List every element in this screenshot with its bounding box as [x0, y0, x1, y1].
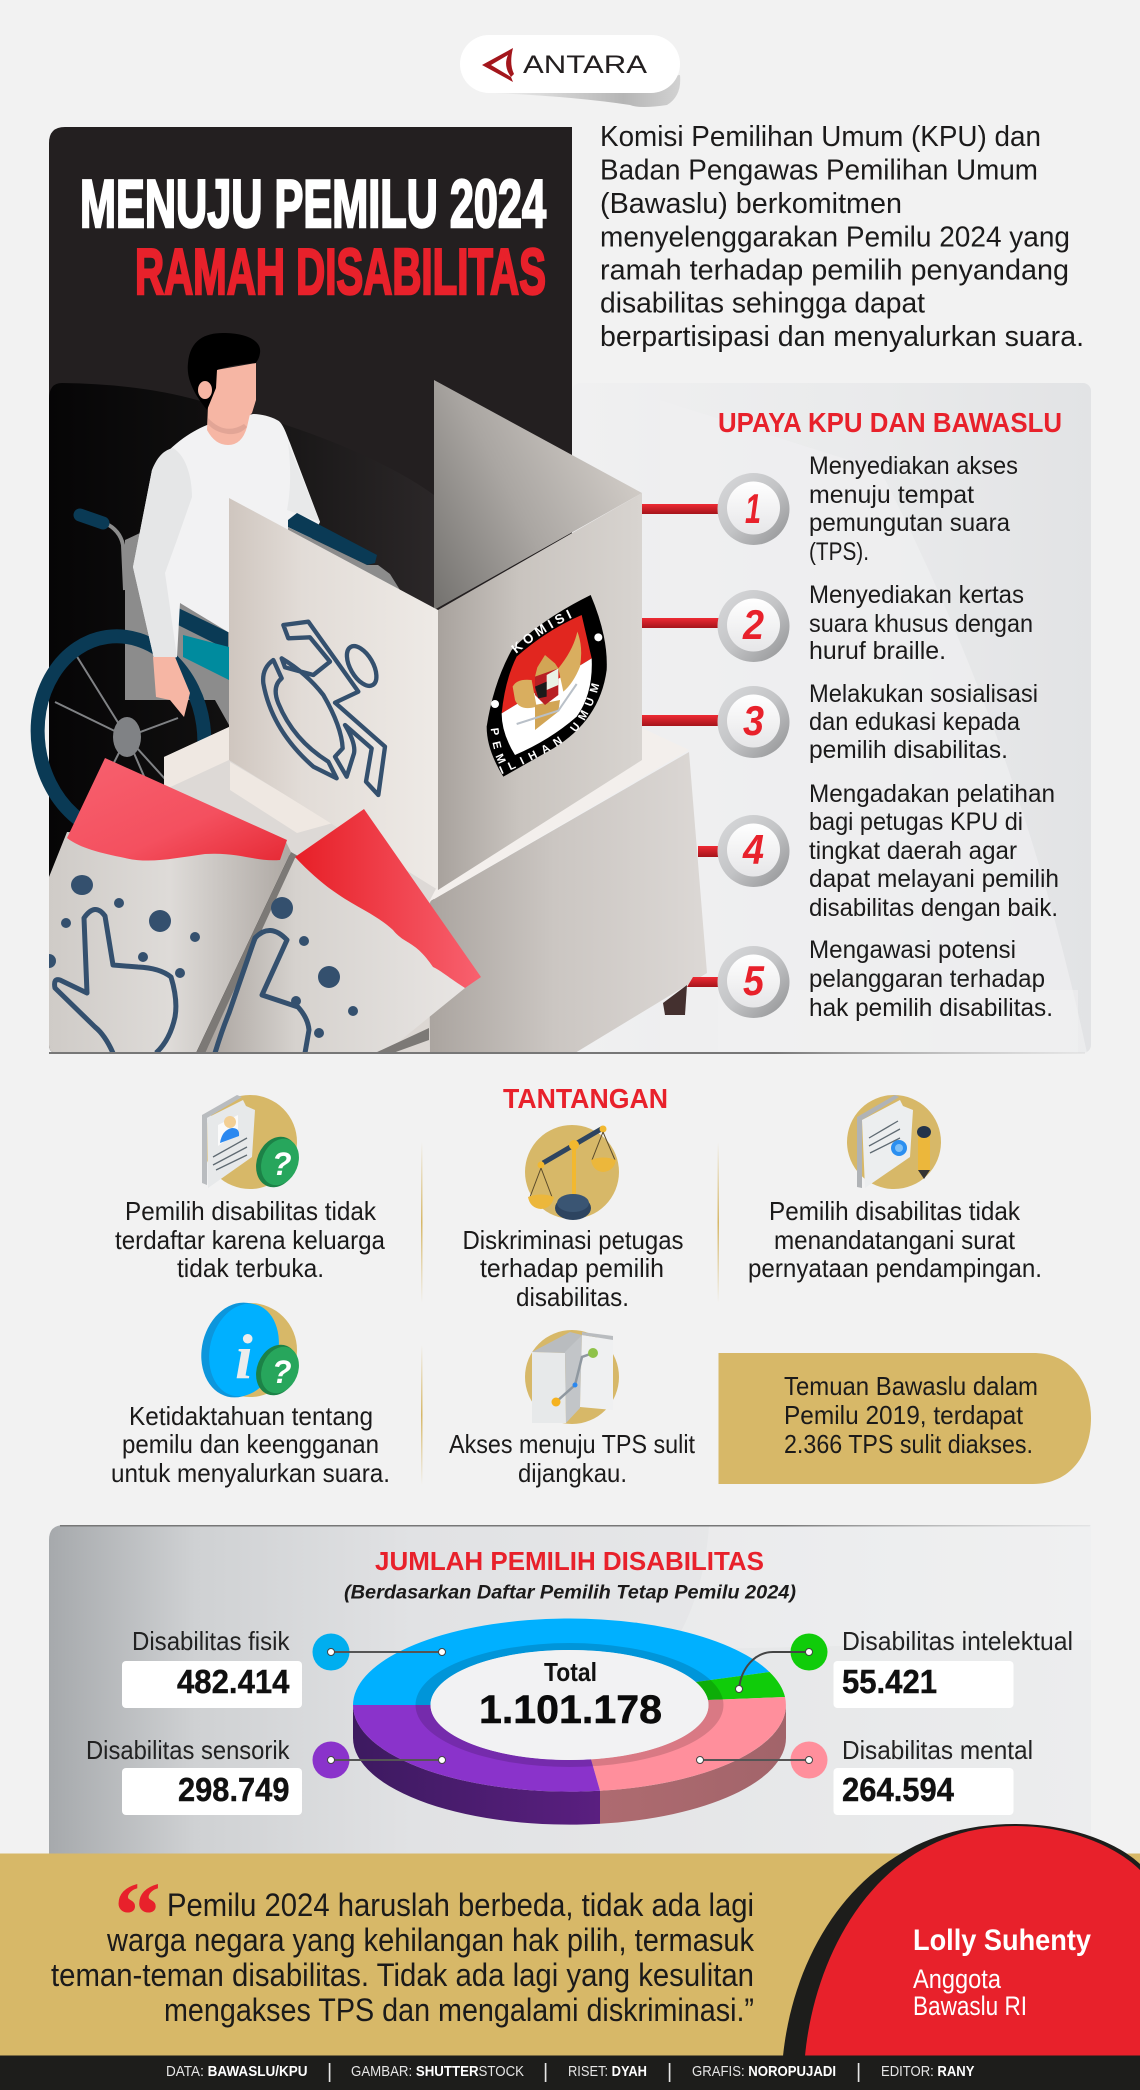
- legend: disabilitas sensorik: 298.749: [178, 1771, 290, 1808]
- icon: info with question: ?: [272, 1354, 292, 1390]
- footer credits: |: [667, 2061, 672, 2083]
- text: challenge 4: Ketidaktahuan tentang: [129, 1401, 373, 1431]
- legend: disabilitas intelektual: [736, 1626, 1073, 1708]
- illustration: floor and seat frame: [49, 383, 434, 1053]
- emblem: KPU logo: PEMILIHAN UMUM: [490, 683, 600, 774]
- hand outlines: [55, 909, 309, 1053]
- badge 3: 3: [743, 697, 764, 744]
- legend: disabilitas fisik: 482.414: [177, 1663, 290, 1700]
- callout: temuan bawaslu: 2.366 TPS sulit diakses.: [784, 1429, 1033, 1459]
- footer credits: GRAFIS: NOROPUJADI: [692, 2063, 836, 2080]
- badge 4: [718, 815, 790, 887]
- ballot flag right: [295, 809, 481, 988]
- item 4 text: dapat melayani pemilih: [809, 865, 1059, 893]
- item 3 text: [809, 680, 1038, 764]
- heading: upaya: UPAYA KPU DAN BAWASLU: [718, 407, 1062, 438]
- item 3 text: Melakukan sosialisasi: [809, 680, 1038, 708]
- item 3 text: pemilih disabilitas.: [809, 736, 1008, 764]
- ballot sheet right: [206, 858, 465, 1052]
- title: [80, 166, 546, 308]
- booth left panel: [229, 498, 438, 890]
- text: challenge 2: Diskriminasi petugas: [462, 1225, 684, 1255]
- text: challenge 3: Pemilih disabilitas tidak: [769, 1196, 1021, 1226]
- booth back panel: [434, 380, 642, 610]
- emblem: KPU logo: [486, 595, 607, 777]
- badge 1: [718, 473, 790, 545]
- footer credits: DATA: BAWASLU/KPU: [166, 2063, 308, 2080]
- callout: temuan bawaslu: [718, 1353, 1091, 1484]
- connector bars: [642, 504, 727, 987]
- item 1 text: [809, 452, 1018, 566]
- legend: disabilitas fisik: Disabilitas fisik: [132, 1626, 290, 1656]
- speaker name: Lolly Suhenty: [913, 1924, 1091, 1957]
- item 2 text: suara khusus dengan: [809, 610, 1033, 638]
- chart title: [344, 1546, 796, 1604]
- quote band: [0, 1854, 1140, 2056]
- quote text: [51, 1887, 755, 2028]
- title: RAMAH DISABILITAS: [135, 235, 546, 308]
- text: challenge 3: menandatangani surat: [774, 1225, 1016, 1255]
- text: challenge 2: terhadap pemilih: [480, 1253, 664, 1283]
- footer credits: RISET: DYAH: [568, 2063, 647, 2080]
- dark floor shape: [49, 383, 434, 1053]
- quote text: warga negara yang kehilangan hak pilih, termasuk: [106, 1922, 755, 1958]
- badge 2: 2: [742, 601, 764, 648]
- text: challenge 1: Pemilih disabilitas tidak: [125, 1196, 377, 1226]
- text: challenge 4: [111, 1401, 390, 1488]
- donut total: [479, 1657, 662, 1732]
- logo: ANTARA: [460, 35, 680, 107]
- icon: info with question: i: [235, 1321, 253, 1392]
- ballot papers: [42, 758, 481, 1053]
- text: challenge 3: pernyataan pendampingan.: [748, 1253, 1042, 1283]
- text: challenge 5: [449, 1429, 696, 1488]
- quote text: mengakses TPS dan mengalami diskriminasi.”: [164, 1992, 754, 2028]
- badge 1: 1: [745, 485, 761, 532]
- donut total: Total: [544, 1657, 597, 1687]
- text: challenge 4: untuk menyalurkan suara.: [111, 1458, 390, 1488]
- item 5 text: [809, 936, 1053, 1022]
- item 5 text: hak pemilih disabilitas.: [809, 994, 1053, 1022]
- badge 2: [718, 590, 790, 662]
- legend: disabilitas fisik: [122, 1626, 446, 1708]
- intro text: Badan Pengawas Pemilihan Umum: [600, 154, 1038, 186]
- item 1 text: menuju tempat: [809, 481, 974, 509]
- text: challenge 3: [748, 1196, 1042, 1283]
- item 5 text: Mengawasi potensi: [809, 936, 1016, 964]
- quote text: Pemilu 2024 haruslah berbeda, tidak ada lagi: [167, 1887, 754, 1923]
- heading: tantangan: TANTANGAN: [503, 1083, 668, 1114]
- item 4 text: Mengadakan pelatihan: [809, 780, 1055, 808]
- ballot edge right: [375, 1028, 429, 1053]
- icon: wheelchair symbol: [263, 622, 385, 795]
- item 1 text: (TPS).: [809, 538, 869, 566]
- braille dots: [42, 875, 358, 1038]
- footer credits: |: [543, 2061, 548, 2083]
- intro text: [600, 121, 1084, 353]
- intro text: ramah terhadap pemilih penyandang: [600, 254, 1069, 286]
- icon: info with question: [191, 1294, 306, 1406]
- item 5 text: pelanggaran terhadap: [809, 965, 1045, 993]
- badge 3: [718, 686, 790, 758]
- speaker name: [913, 1924, 1091, 2021]
- item 1 text: pemungutan suara: [809, 509, 1010, 537]
- wheelchair seat frame: [125, 533, 229, 725]
- text: challenge 1: tidak terbuka.: [177, 1253, 324, 1283]
- intro text: disabilitas sehingga dapat: [600, 288, 925, 320]
- legend: disabilitas sensorik: [86, 1735, 446, 1815]
- chart title: JUMLAH PEMILIH DISABILITAS: [375, 1546, 764, 1576]
- item 2 text: [809, 581, 1033, 665]
- icon: balance scale: [525, 1125, 619, 1220]
- footer credits: |: [327, 2061, 332, 2083]
- text: challenge 2: [462, 1225, 684, 1312]
- ballot flag left: [67, 758, 287, 861]
- speaker name: Anggota: [913, 1964, 1002, 1994]
- badge 5: [718, 946, 790, 1018]
- panel bottom edge: [49, 1052, 1085, 1054]
- panel: chart background: [49, 1525, 1091, 1854]
- text: challenge 2: disabilitas.: [516, 1282, 629, 1312]
- table right face: [429, 752, 707, 1053]
- intro text: menyelenggarakan Pemilu 2024 yang: [600, 222, 1070, 254]
- quote text: teman-teman disabilitas. Tidak ada lagi yang kesulitan: [51, 1957, 754, 1993]
- donut total: 1.101.178: [479, 1688, 662, 1732]
- footer credits: GAMBAR: SHUTTERSTOCK: [351, 2063, 524, 2080]
- logo: ANTARA: ANTARA: [523, 51, 647, 79]
- item 1 text: Menyediakan akses: [809, 452, 1018, 480]
- legend: disabilitas intelektual: 55.421: [842, 1663, 937, 1700]
- panel: upaya background: [572, 383, 1091, 1053]
- legend: disabilitas mental: 264.594: [842, 1771, 955, 1808]
- ballot edge: [196, 852, 298, 1053]
- legend: disabilitas intelektual: Disabilitas intelektual: [842, 1626, 1073, 1656]
- quote mark: “: [114, 1864, 161, 1968]
- item 2 text: huruf braille.: [809, 637, 946, 665]
- intro text: (Bawaslu) berkomitmen: [600, 188, 902, 220]
- item 3 text: dan edukasi kepada: [809, 708, 1020, 736]
- text: challenge 1: terdaftar karena keluarga: [115, 1225, 385, 1255]
- title: MENUJU PEMILU 2024: [80, 166, 546, 242]
- table base under ballots: [300, 860, 430, 1053]
- legend: disabilitas mental: Disabilitas mental: [842, 1735, 1033, 1765]
- text: challenge 5: Akses menuju TPS sulit: [449, 1429, 696, 1459]
- ballot sheet left: [49, 832, 291, 1053]
- legend: disabilitas sensorik: Disabilitas sensorik: [86, 1735, 290, 1765]
- footer credits: [0, 2056, 1140, 2090]
- table surface: [164, 727, 689, 905]
- table leg: [663, 985, 687, 1015]
- wheelchair wheel: [25, 625, 217, 847]
- item 4 text: tingkat daerah agar: [809, 837, 1017, 865]
- wheelchair handle left: [80, 515, 125, 590]
- item 4 text: [809, 780, 1059, 922]
- panel: dark illustration backdrop: [49, 127, 572, 700]
- badge 4: 4: [742, 826, 764, 873]
- item 2 text: Menyediakan kertas: [809, 581, 1024, 609]
- callout: temuan bawaslu: Temuan Bawaslu dalam: [784, 1371, 1038, 1401]
- badge 5: 5: [743, 957, 765, 1004]
- icon: access route: [525, 1330, 619, 1424]
- speaker name: Bawaslu RI: [913, 1991, 1027, 2021]
- footer credits: |: [856, 2061, 861, 2083]
- item 4 text: disabilitas dengan baik.: [809, 894, 1058, 922]
- column dividers: [421, 1142, 719, 1485]
- text: challenge 1: [115, 1196, 385, 1283]
- icon: signed statement: [847, 1095, 941, 1189]
- intro text: Komisi Pemilihan Umum (KPU) dan: [600, 121, 1041, 153]
- seated man: [133, 333, 320, 717]
- chart title: (Berdasarkan Daftar Pemilih Tetap Pemilu 2024): [344, 1582, 796, 1604]
- text: challenge 5: dijangkau.: [518, 1458, 627, 1488]
- booth right panel: [438, 493, 642, 890]
- wheelchair armrest right: [288, 513, 400, 592]
- icon: document with question: ?: [272, 1146, 292, 1182]
- speaker circle: [783, 1824, 1140, 2056]
- intro text: berpartisipasi dan menyalurkan suara.: [600, 321, 1084, 353]
- text: challenge 4: pemilu dan keengganan: [122, 1429, 379, 1459]
- callout: temuan bawaslu: Pemilu 2019, terdapat: [784, 1400, 1024, 1430]
- icon: document with question: [202, 1095, 306, 1194]
- footer credits: EDITOR: RANY: [881, 2063, 974, 2080]
- emblem: KPU logo: KOMISI: [511, 610, 572, 654]
- item 4 text: bagi petugas KPU di: [809, 808, 1023, 836]
- legend: disabilitas mental: [696, 1735, 1033, 1815]
- donut chart: [353, 1618, 786, 1825]
